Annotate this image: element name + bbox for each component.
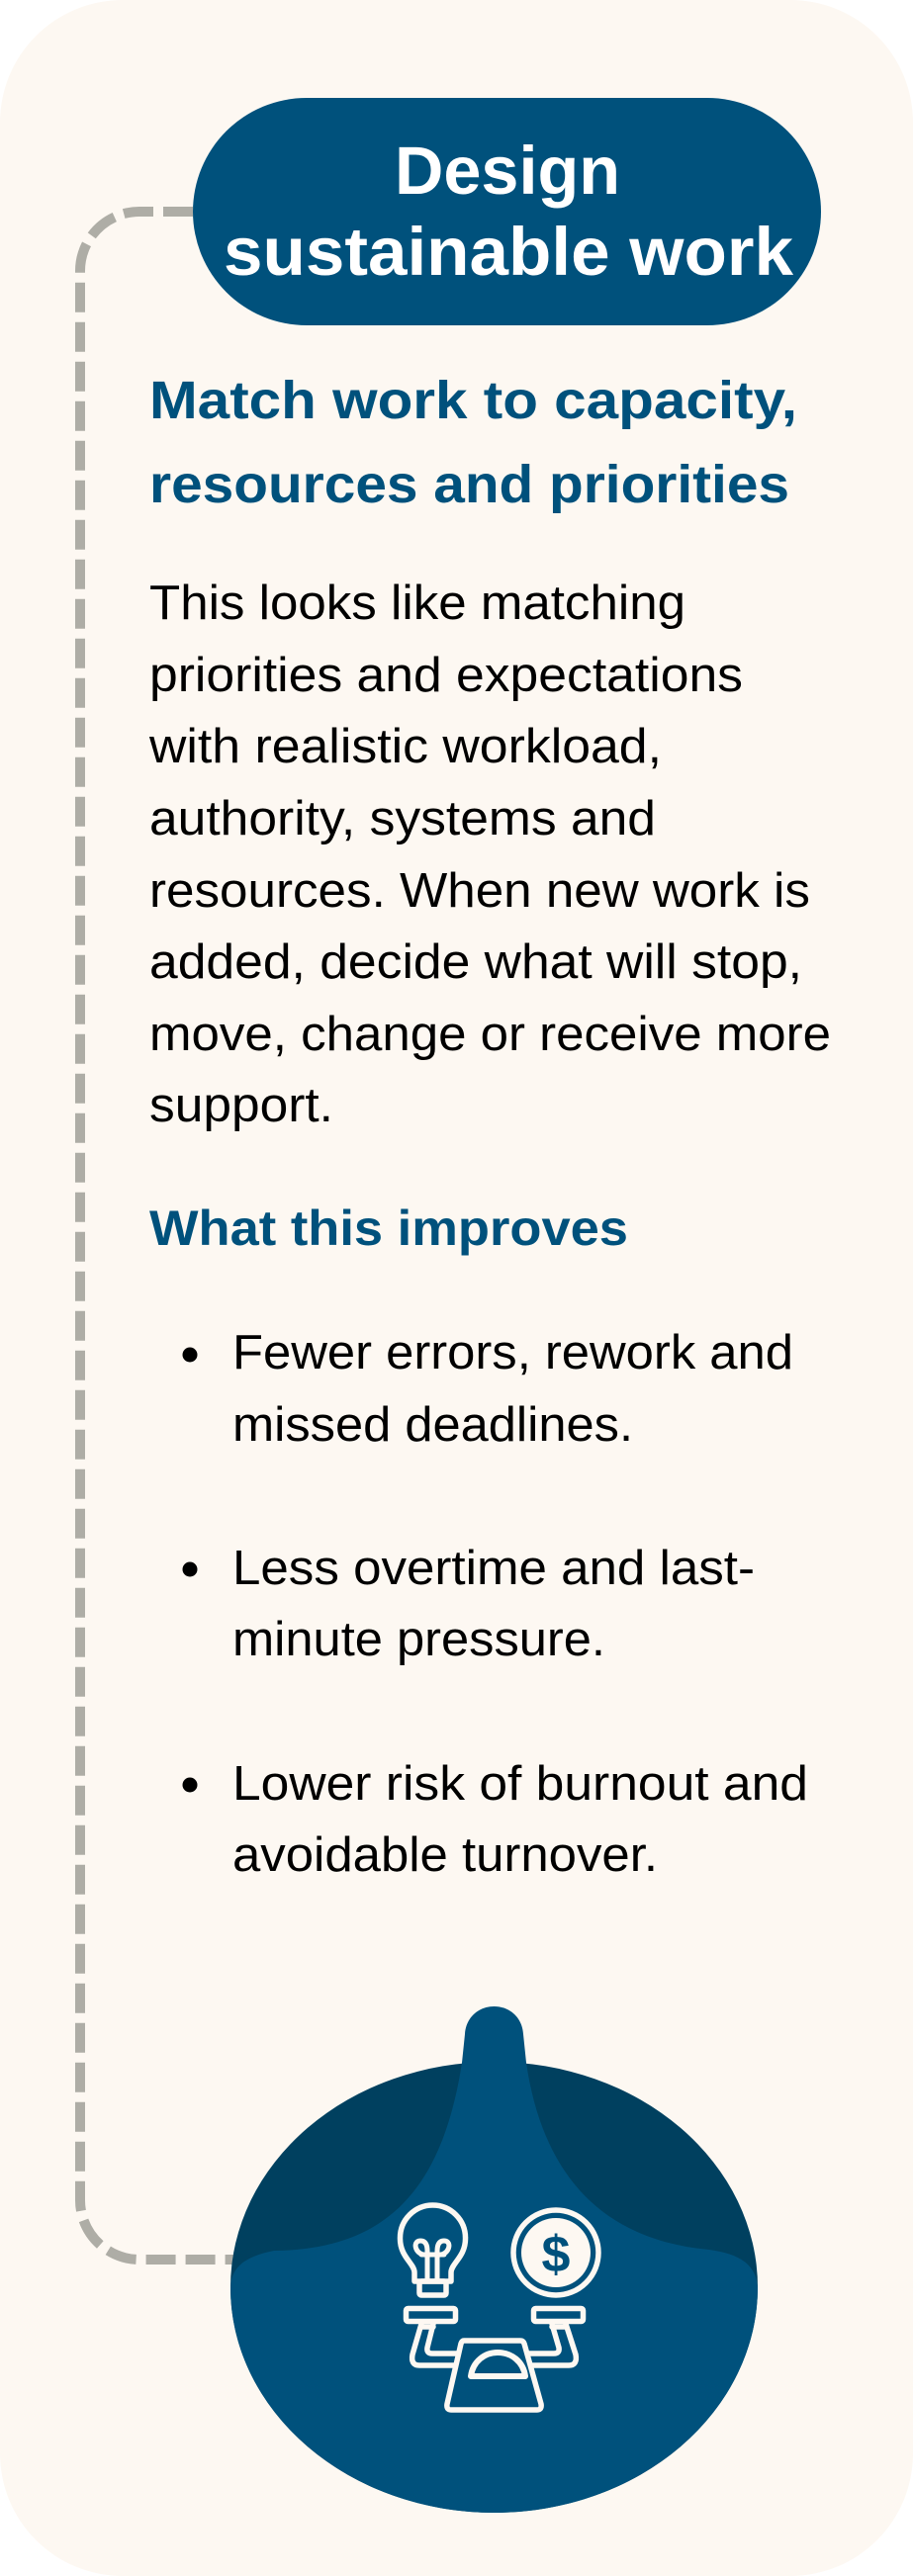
icon: scale base xyxy=(447,2341,541,2410)
title text: sustainable work xyxy=(224,214,794,290)
heading: match work: resources and priorities xyxy=(149,455,789,514)
body paragraph: move, change or receive more xyxy=(149,1008,831,1061)
icon: dollar coin: $ xyxy=(542,2226,571,2283)
dashed connector line xyxy=(80,212,237,2260)
bullet 3: Lower risk of burnout and xyxy=(232,1757,808,1811)
bullet 1 xyxy=(182,1326,793,1452)
bullet 1: missed deadlines. xyxy=(232,1398,633,1452)
bullet 3: avoidable turnover. xyxy=(232,1828,658,1882)
icon: scale pans and arms xyxy=(406,2308,584,2365)
title text xyxy=(224,133,794,290)
title pill xyxy=(193,98,821,325)
body paragraph: This looks like matching xyxy=(149,577,685,630)
body paragraph: authority, systems and xyxy=(149,792,656,845)
body paragraph: added, decide what will stop, xyxy=(149,935,802,989)
body paragraph: support. xyxy=(149,1079,333,1132)
title text: Design xyxy=(395,133,620,209)
body paragraph: priorities and expectations xyxy=(149,649,743,702)
icon: lightbulb xyxy=(400,2205,466,2295)
icon badge: droplet circle xyxy=(230,2006,758,2513)
body paragraph: with realistic workload, xyxy=(148,720,662,773)
heading: match work xyxy=(149,371,797,514)
heading: what this improves: What this improves xyxy=(149,1200,628,1256)
icon: balance scale with lightbulb and coin xyxy=(400,2205,598,2410)
body paragraph: resources. When new work is xyxy=(149,864,810,918)
bullet 2: Less overtime and last- xyxy=(232,1542,755,1595)
bullet 1: Fewer errors, rework and xyxy=(232,1326,793,1379)
bullet list xyxy=(182,1326,808,1882)
bullet 2: minute pressure. xyxy=(232,1613,605,1666)
body paragraph xyxy=(148,577,831,1132)
bullet 3 xyxy=(182,1757,808,1882)
bullet 2 xyxy=(182,1542,755,1666)
heading: match work: Match work to capacity, xyxy=(149,371,797,430)
icon: dollar coin xyxy=(513,2210,598,2295)
